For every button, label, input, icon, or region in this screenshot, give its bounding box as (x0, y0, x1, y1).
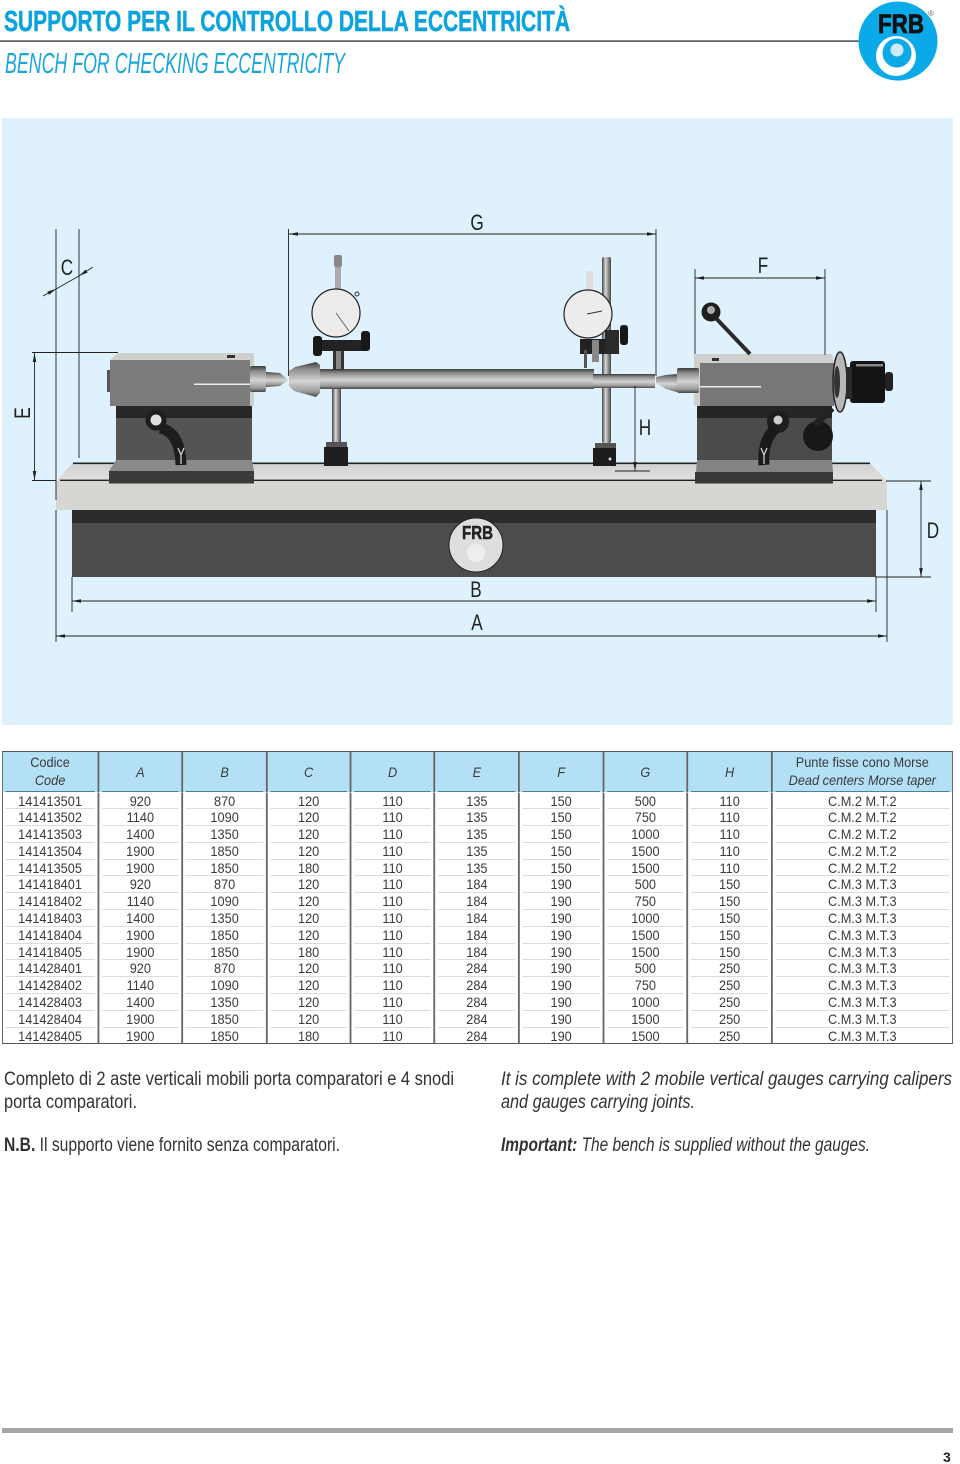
table rows (6, 792, 950, 1044)
table rows: 190 (550, 910, 572, 926)
table rows: C.M.3 M.T.3 (828, 944, 897, 960)
left gauge rod (324, 386, 348, 466)
table rows: 1900 (126, 860, 155, 876)
table header: Codice (30, 754, 70, 770)
table rows: 190 (550, 1011, 572, 1027)
tailstock lever (702, 302, 750, 354)
header (0, 2, 938, 80)
table rows: 1900 (126, 944, 155, 960)
subtitle: BENCH FOR CHECKING ECCENTRICITY (5, 48, 347, 80)
table rows: 110 (382, 792, 403, 808)
table header: E (473, 764, 481, 780)
table rows: 120 (298, 809, 319, 825)
panel: bench diagram (2, 118, 953, 725)
table rows: 180 (298, 944, 319, 960)
header rule (0, 40, 862, 42)
table rows: 135 (466, 860, 487, 876)
table rows: 110 (382, 860, 403, 876)
title: SUPPORTO PER IL CONTROLLO DELLA ECCENTRICITÀ (4, 4, 570, 38)
table rows: 135 (466, 826, 487, 842)
table rows: C.M.3 M.T.3 (828, 876, 897, 892)
table rows: 250 (719, 994, 740, 1010)
table rows: 184 (466, 944, 487, 960)
right tailstock (694, 354, 834, 484)
table rows: 920 (130, 792, 151, 808)
left dial gauge (312, 255, 370, 370)
table rows: 120 (298, 977, 319, 993)
table rows: 1350 (210, 826, 239, 842)
table rows: 184 (466, 876, 487, 892)
notes (4, 1069, 952, 1156)
table rows: C.M.3 M.T.3 (828, 893, 897, 909)
table rows: 150 (550, 826, 572, 842)
table rows: 190 (550, 994, 572, 1010)
table rows: 250 (719, 1028, 740, 1044)
table header: G (640, 764, 650, 780)
right dial gauge (564, 271, 628, 368)
note: English: and gauges carrying joints. (501, 1092, 695, 1113)
table rows: 120 (298, 843, 319, 859)
table rows: 141418402 (18, 893, 82, 909)
table rows: 1850 (210, 1011, 239, 1027)
table rows: 150 (719, 893, 740, 909)
table rows: 190 (550, 977, 572, 993)
table rows: 150 (719, 944, 740, 960)
table rows: 1090 (210, 893, 239, 909)
note: English: Important: The bench is supplied without the gauges. (501, 1135, 870, 1156)
dimension labels (11, 211, 939, 636)
note: Italian: N.B. Il supporto viene fornito senza comparatori. (4, 1135, 340, 1156)
table rows: C.M.2 M.T.2 (828, 860, 897, 876)
dimension labels: E (11, 407, 36, 419)
table rows: 110 (382, 910, 403, 926)
badge: FRB emblem (449, 518, 503, 572)
table rows: 110 (382, 960, 403, 976)
note: English (501, 1069, 952, 1156)
bench base (56, 462, 887, 577)
dimension labels: B (470, 578, 482, 603)
table rows: 141418404 (18, 927, 82, 943)
table rows: 1850 (210, 1028, 239, 1044)
dimension labels: G (470, 211, 484, 236)
table rows: C.M.2 M.T.2 (828, 826, 897, 842)
table header (2, 752, 952, 793)
table rows: 1850 (210, 944, 239, 960)
table rows: 141428401 (18, 960, 82, 976)
table header: C (304, 764, 313, 780)
table header: F (557, 764, 565, 780)
table rows: 180 (298, 1028, 319, 1044)
table rows: 250 (719, 977, 740, 993)
table rows: 135 (466, 809, 487, 825)
table rows: 920 (130, 960, 151, 976)
table rows: 250 (719, 1011, 740, 1027)
table rows: 120 (298, 826, 319, 842)
table rows: 110 (719, 792, 740, 808)
table rows: C.M.2 M.T.2 (828, 792, 897, 808)
table header: H (725, 764, 734, 780)
table rows: 870 (214, 792, 235, 808)
table rows: C.M.3 M.T.3 (828, 1028, 897, 1044)
table rows: 284 (466, 1028, 487, 1044)
table rows: 190 (550, 893, 572, 909)
table rows: 184 (466, 893, 487, 909)
table rows: 135 (466, 843, 487, 859)
dimension labels: A (471, 611, 483, 636)
table rows: 1140 (127, 893, 154, 909)
table header: A (136, 764, 145, 780)
table rows: 180 (298, 860, 319, 876)
table header: Dead centers Morse taper (789, 772, 936, 788)
table rows: 110 (382, 826, 403, 842)
table rows: 1900 (126, 927, 155, 943)
table rows: 150 (550, 809, 572, 825)
table rows: 110 (719, 860, 740, 876)
table rows: 135 (466, 792, 487, 808)
table rows: 110 (382, 994, 403, 1010)
left headstock (107, 353, 254, 484)
table rows: 1350 (210, 910, 239, 926)
dimension labels: C (61, 256, 73, 281)
table rows: 1850 (210, 927, 239, 943)
table rows: 750 (635, 977, 656, 993)
table rows: C.M.2 M.T.2 (828, 809, 897, 825)
table rows: 110 (382, 1011, 403, 1027)
table rows: 1140 (127, 809, 154, 825)
note: Italian: porta comparatori. (4, 1092, 137, 1113)
right center (656, 368, 699, 393)
table rows: 1900 (126, 1011, 155, 1027)
icon: FRB logo: FRB (878, 9, 924, 39)
table rows: 1900 (126, 1028, 155, 1044)
table rows: 141413503 (18, 826, 82, 842)
table rows: 141428402 (18, 977, 82, 993)
table rows: 870 (214, 960, 235, 976)
table rows: 1090 (210, 809, 239, 825)
table rows: 141418405 (18, 944, 82, 960)
table rows: 1500 (631, 843, 660, 859)
table rows: C.M.3 M.T.3 (828, 977, 897, 993)
table rows: 1500 (631, 927, 660, 943)
table rows: 120 (298, 960, 319, 976)
table rows: C.M.3 M.T.3 (828, 1011, 897, 1027)
table rows: 750 (635, 809, 656, 825)
table rows: 1850 (210, 843, 239, 859)
table rows: 110 (382, 893, 403, 909)
table rows: 250 (719, 960, 740, 976)
dimension labels: F (758, 254, 768, 279)
table rows: 1400 (126, 910, 155, 926)
table rows: 141413501 (18, 792, 82, 808)
table rows: 141428404 (18, 1011, 82, 1027)
table rows: 141413505 (18, 860, 82, 876)
table rows: 870 (214, 876, 235, 892)
table rows: 190 (550, 927, 572, 943)
table rows: 284 (466, 977, 487, 993)
table rows: 110 (719, 843, 740, 859)
table rows: 1000 (631, 826, 660, 842)
table rows: 141418403 (18, 910, 82, 926)
table rows: 190 (550, 960, 572, 976)
table rows: 110 (382, 927, 403, 943)
table rows: C.M.2 M.T.2 (828, 843, 897, 859)
table rows: 500 (635, 876, 656, 892)
table rows: 190 (550, 1028, 572, 1044)
table rows: 150 (719, 876, 740, 892)
table rows: 150 (550, 860, 572, 876)
table rows: 1000 (631, 994, 660, 1010)
table rows: 150 (719, 927, 740, 943)
table rows: 120 (298, 1011, 319, 1027)
table rows: 141428405 (18, 1028, 82, 1044)
table rows: 190 (550, 876, 572, 892)
table rows: 284 (466, 994, 487, 1010)
table rows: 110 (382, 1028, 403, 1044)
table rows: 141418401 (18, 876, 82, 892)
table rows: 110 (719, 809, 740, 825)
arbor shaft (289, 362, 655, 397)
table rows: 1400 (126, 826, 155, 842)
badge: FRB emblem: FRB (462, 523, 493, 543)
table rows: 141428403 (18, 994, 82, 1010)
dimension labels: H (639, 416, 651, 441)
table rows: C.M.3 M.T.3 (828, 994, 897, 1010)
table rows: 110 (382, 809, 403, 825)
table rows: 1090 (210, 977, 239, 993)
table rows: 110 (382, 843, 403, 859)
table rows: 1400 (126, 994, 155, 1010)
table rows: 110 (382, 977, 403, 993)
table rows: 500 (635, 792, 656, 808)
table rows: 1500 (631, 860, 660, 876)
table rows: 1500 (631, 1028, 660, 1044)
table rows: 120 (298, 893, 319, 909)
table rows: C.M.3 M.T.3 (828, 927, 897, 943)
table rows: 1140 (127, 977, 154, 993)
table rows: 110 (382, 944, 403, 960)
table rows: 150 (719, 910, 740, 926)
table rows: 920 (130, 876, 151, 892)
table rows: 150 (550, 843, 572, 859)
table rows: 120 (298, 910, 319, 926)
table header: B (220, 764, 229, 780)
table rows: 284 (466, 960, 487, 976)
table: dimensions (2, 751, 953, 1044)
table rows: 141413502 (18, 809, 82, 825)
table rows: 1000 (631, 910, 660, 926)
table rows: 150 (550, 792, 572, 808)
table rows: 284 (466, 1011, 487, 1027)
table rows: 120 (298, 876, 319, 892)
tailstock handwheel (833, 352, 893, 412)
dimension labels: D (927, 519, 939, 544)
table rows: 120 (298, 994, 319, 1010)
table rows: 1500 (631, 944, 660, 960)
table rows: C.M.3 M.T.3 (828, 960, 897, 976)
icon: FRB logo (858, 2, 938, 80)
table rows: C.M.3 M.T.3 (828, 910, 897, 926)
table rows: 120 (298, 792, 319, 808)
table rows: 1350 (210, 994, 239, 1010)
right gauge rod (593, 257, 616, 466)
table rows: 190 (550, 944, 572, 960)
table rows: 750 (635, 893, 656, 909)
table rows: 500 (635, 960, 656, 976)
table header: Code (35, 772, 65, 788)
table rows: 1850 (210, 860, 239, 876)
table rows: 110 (719, 826, 740, 842)
left center (250, 366, 288, 392)
table rows: 1500 (631, 1011, 660, 1027)
note: Italian (4, 1069, 454, 1156)
table rows: 120 (298, 927, 319, 943)
table rows: 141413504 (18, 843, 82, 859)
table rows: 184 (466, 927, 487, 943)
dimension lines (32, 229, 931, 642)
table header: D (388, 764, 397, 780)
table rows: 184 (466, 910, 487, 926)
footer bar (2, 1428, 953, 1433)
table header: Punte fisse cono Morse (796, 754, 929, 770)
icon: FRB logo: ® (928, 9, 934, 18)
table rows: 110 (382, 876, 403, 892)
note: Italian: Completo di 2 aste verticali mobili porta comparatori e 4 snodi (4, 1069, 454, 1090)
table rows: 1900 (126, 843, 155, 859)
